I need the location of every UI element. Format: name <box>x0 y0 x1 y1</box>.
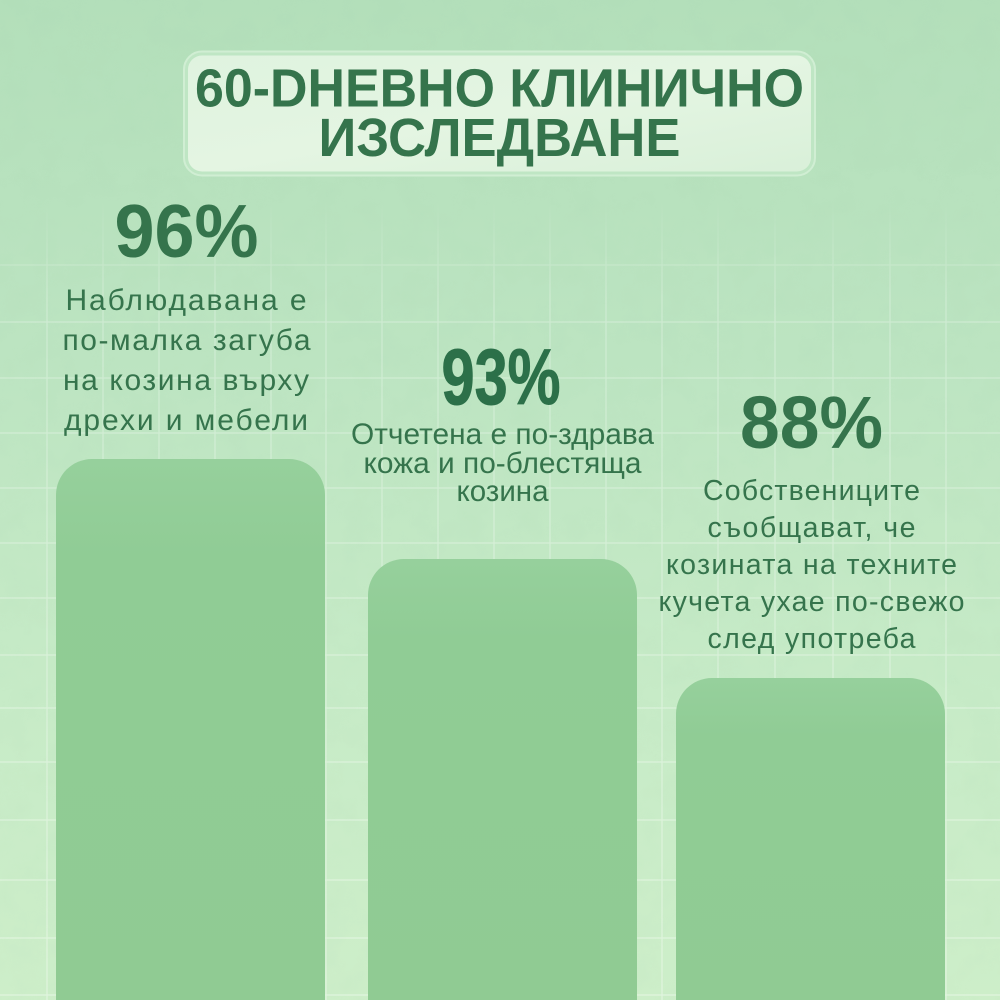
column 2 description: козина <box>456 475 549 508</box>
column 1 description: Наблюдавана е <box>66 284 306 317</box>
column 3 description: кучета ухае по-свежо <box>658 586 964 618</box>
column 3 description: козината на техните <box>666 549 957 581</box>
column 3 description: съобщават, че <box>708 512 916 544</box>
column 3 description: Собствениците <box>703 475 920 507</box>
column 3 description: след употреба <box>708 623 916 655</box>
title: 60-DНЕВНО КЛИНИЧНО <box>195 58 804 118</box>
column 1 description: по-малка загуба <box>62 324 311 357</box>
title <box>195 58 804 168</box>
column 2 description: Отчетена е по-здрава <box>351 418 655 451</box>
column 3 value: 88% <box>740 381 883 464</box>
column 2 description: кожа и по-блестяща <box>364 447 642 480</box>
column 3 description <box>658 475 964 655</box>
column 3 bar <box>676 678 945 1000</box>
title panel <box>184 52 815 176</box>
column 2 bar <box>368 559 637 1000</box>
column 1 description <box>62 284 311 437</box>
title: ИЗСЛЕДВАНЕ <box>318 108 680 168</box>
column 2 description <box>351 418 655 508</box>
column 1 bar <box>56 459 325 1000</box>
column 2 value: 93% <box>442 332 560 421</box>
column 1 description: на козина върху <box>63 364 309 397</box>
column 1 value: 96% <box>114 189 258 273</box>
column 1 description: дрехи и мебели <box>64 404 308 437</box>
